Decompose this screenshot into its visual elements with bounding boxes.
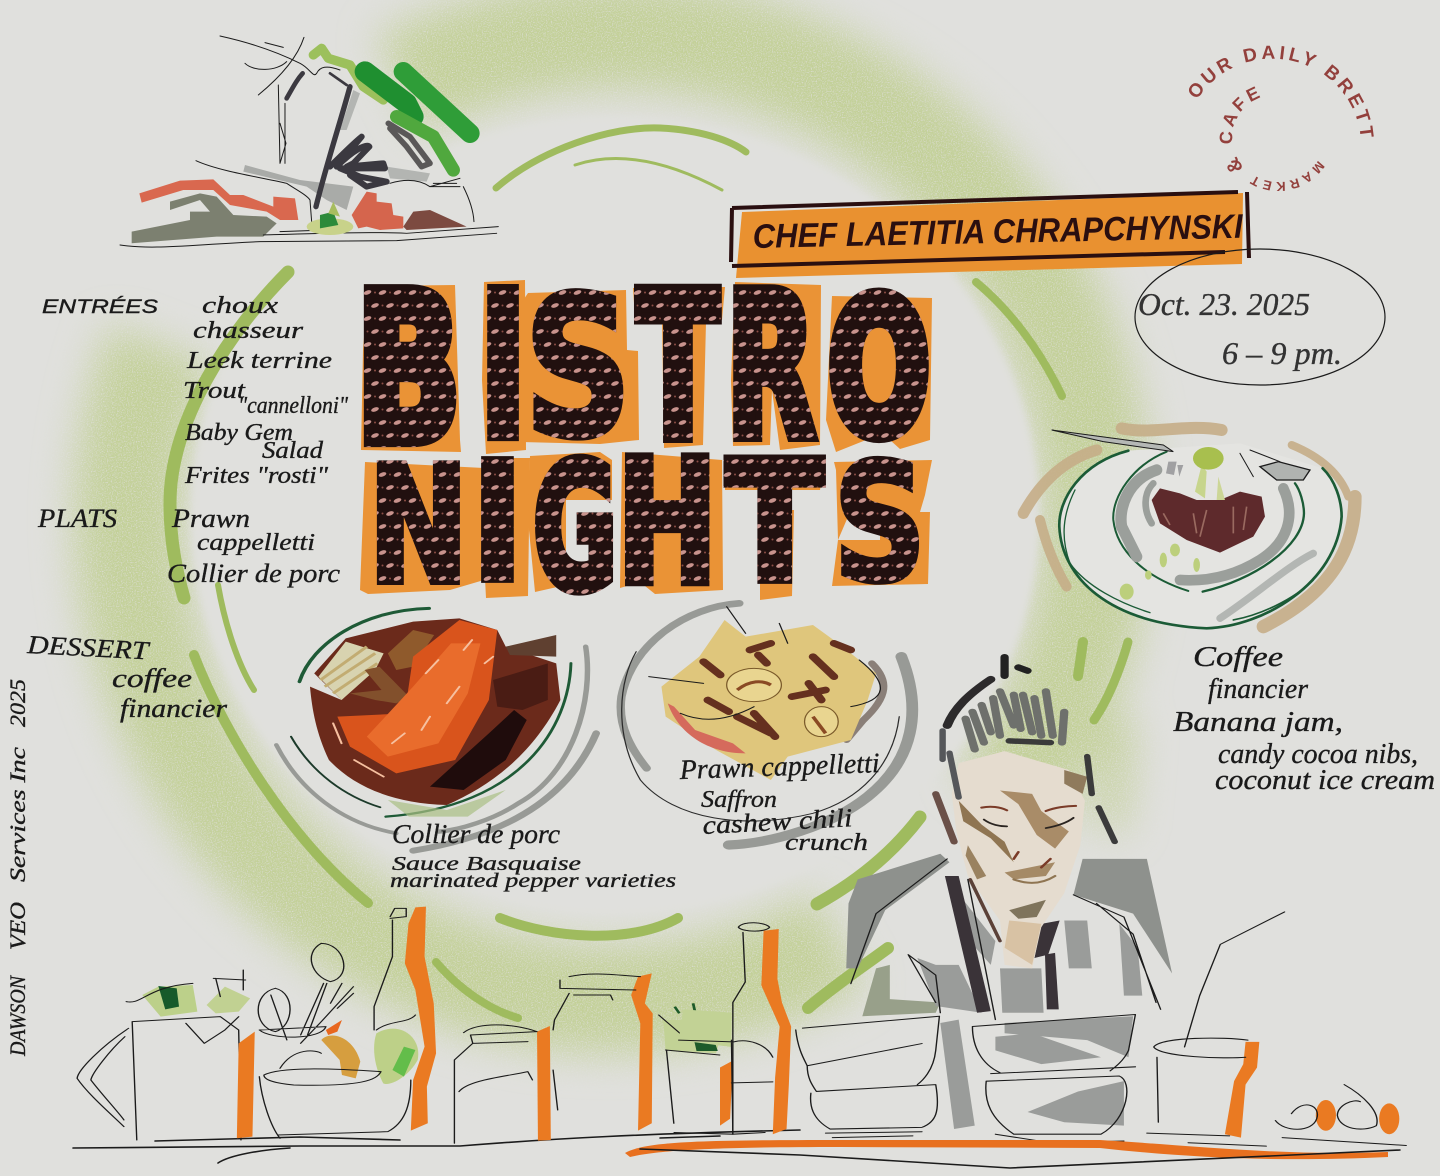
jar with stirring line [1147,912,1285,1146]
dark lettering: O [828,261,930,477]
plats: cappelletti [197,530,315,556]
stamp inner text: MARKET & CAFE [1220,86,1325,191]
plats: PLATS [37,504,117,533]
signature vertical: 2025 [5,679,30,727]
green foliage [313,48,470,170]
orange counter line [625,1140,1388,1159]
spoons [1052,430,1310,480]
jar 2 [553,973,653,1131]
dish: collier de porc [276,608,596,851]
dark lettering: S [833,428,927,619]
coffee financier caption: financier [1208,674,1308,705]
eyes, brows, mouth [982,806,1076,883]
signature vertical: VEO [5,902,30,950]
green airbrushed ring [128,35,1120,999]
plats: Prawn [171,504,250,533]
signature vertical: Services Inc [5,747,30,882]
dark lettering: T [727,426,823,618]
time: 6 – 9 pm. [1222,335,1342,371]
dark lettering: T [637,251,719,486]
orange letter shadows [360,280,932,600]
counter ink lines [73,1130,1400,1168]
signature vertical [5,679,30,1057]
stamp outer text: OUR DAILY BRETT [1189,46,1374,137]
dark lettering: G [533,426,618,629]
plate rims [276,608,596,851]
collier caption: Sauce Basquaise [392,853,581,875]
stacked bowls centre [796,1016,939,1138]
grey wash [132,90,430,243]
dark lettering: B [356,251,461,489]
dessert: coffee [112,664,192,693]
dish captions [390,748,880,892]
cappelletti caption [678,748,880,856]
shoulders [846,854,1172,1016]
chef portrait [846,657,1172,1129]
bottle 1 [374,907,436,1131]
dessert [26,630,228,723]
face [952,751,1087,968]
plate rims [621,603,912,845]
title: bistro nights [360,280,932,600]
apron straps [945,876,1060,1013]
outer plate rim [1059,451,1342,628]
chef name: CHEF LAETITIA CHRAPCHYNSKI [752,208,1244,256]
entrees: choux [202,293,278,319]
entrees: Baby Gem [185,420,293,446]
utensils [258,943,353,1043]
dark lettering: I [467,423,528,623]
dessert: financier [120,694,228,723]
stacked bowls right [972,1014,1135,1143]
pen contour [851,859,1161,1020]
plats: Collier de porc [167,559,341,588]
entrees: Frites "rosti" [184,463,329,489]
plate base [1059,443,1342,628]
pitcher and herbs [77,970,250,1140]
entrees: chasseur [193,318,304,344]
hair strokes [936,657,1115,941]
tan wash [1023,428,1355,627]
salmon rocks [139,179,467,230]
date oval [1135,249,1385,385]
entrees: ENTRÉES [42,297,158,318]
dessert: DESSERT [26,630,151,665]
cappelletti caption: crunch [785,830,868,856]
cappelletti caption: Prawn cappelletti [678,748,880,786]
dish: coffee financier [1023,428,1355,628]
coffee financier caption [1173,642,1435,796]
collier caption [390,819,676,892]
coffee financier caption: coconut ice cream [1215,765,1435,796]
entrees: Salad [262,438,324,464]
green brush arcs [170,128,1128,1018]
kitchen objects centre [674,923,791,1134]
fruit on table [1275,1085,1406,1145]
coffee financier caption: Banana jam, [1173,707,1343,738]
entrees: Leek terrine [186,348,332,374]
crumble [704,643,851,737]
plant pot right part [674,1009,773,1134]
sauce and pork [310,618,560,817]
bottle 2 [733,923,791,1134]
signature vertical: DAWSON [5,975,30,1057]
dark lettering: N [369,434,468,620]
entrees: "cannelloni" [238,393,349,419]
fruit bowl [259,1015,418,1138]
dark lettering: S [524,255,632,481]
pen lines [120,36,498,247]
chef banner [731,192,1249,278]
kitchen objects left [77,907,720,1143]
plant pot [659,1003,720,1123]
dark lettering: R [726,250,816,484]
dark lettering: H [617,422,717,623]
collier caption: Collier de porc [392,819,560,849]
plats [37,504,341,588]
centre shrub [307,202,353,235]
landscape sketch [120,36,498,247]
cappelletti caption: cashew chili [702,803,853,840]
ice cream and cake [1152,447,1265,553]
orange edge strip 1 [237,1032,255,1138]
dark marker strokes [287,73,430,207]
date: Oct. 23. 2025 [1138,286,1310,322]
cappelletti caption: Saffron [701,787,777,813]
coffee financier caption: Coffee [1193,642,1283,673]
coffee financier caption: candy cocoa nibs, [1218,739,1418,770]
green sauce dots [1120,544,1200,600]
jar 1 [454,1025,551,1143]
dish: prawn cappelletti [621,603,912,845]
pasta [661,620,876,780]
dark lettering [356,243,930,629]
grey inner ring [1121,470,1313,618]
collier caption: marinated pepper varieties [390,870,676,892]
entrees [42,293,349,489]
stamp: our daily market & cafe [1189,46,1374,191]
dark lettering: I [473,243,533,491]
entrees: Trout [183,378,247,404]
menu list [26,293,349,723]
apron and shirt shadows [917,900,1142,1129]
highlights [333,640,493,777]
